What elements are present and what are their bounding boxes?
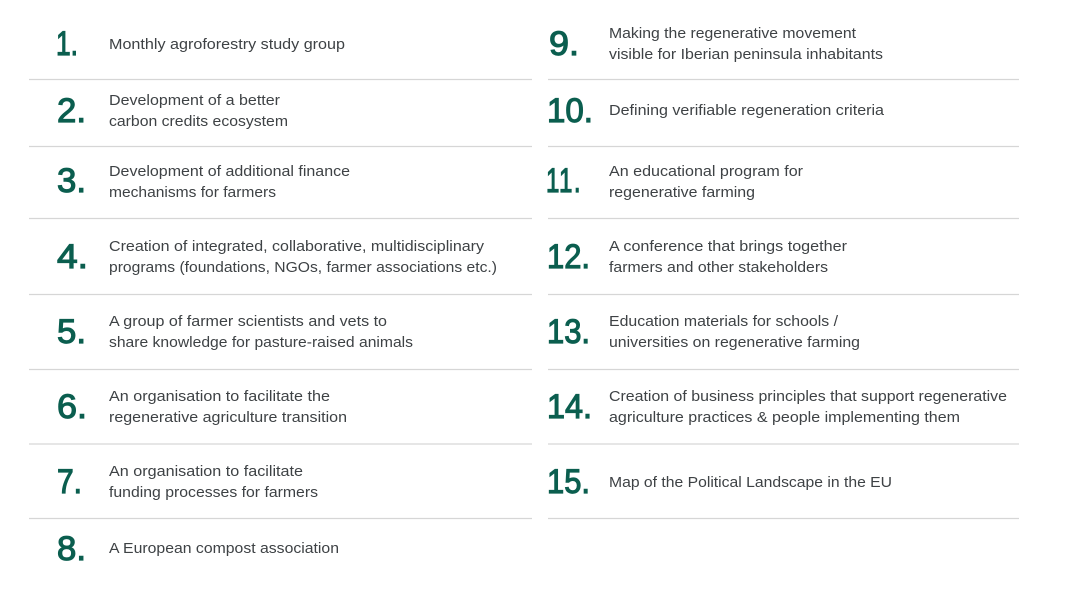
item 7: funding organisation <box>57 463 318 501</box>
item 4: multidisciplinary programs <box>57 238 497 276</box>
item 6: transition organisation: An organisation to facilitate the <box>109 389 330 405</box>
item 6: transition organisation <box>57 388 347 426</box>
item 11: educational program: An educational program for <box>609 164 803 180</box>
item 8: compost association: 8. <box>57 530 86 568</box>
item 9: visible movement: visible for Iberian peninsula inhabitants <box>609 47 883 63</box>
item 12: conference: A conference that brings together <box>609 239 847 255</box>
item 9: visible movement: Making the regenerative movement <box>609 26 856 42</box>
item 3: additional finance mechanisms: 3. <box>57 162 86 200</box>
item 1: agroforestry study group <box>56 25 345 63</box>
item 5: farmer scientists and vets: 5. <box>57 313 86 351</box>
item 10: regeneration criteria: 10. <box>547 92 593 130</box>
item 12: conference <box>547 238 847 276</box>
item 13: education materials: Education materials for schools / <box>609 314 839 330</box>
item 15: political landscape map: Map of the Political Landscape in the EU <box>609 475 892 491</box>
item 1: agroforestry study group: 1. <box>56 25 78 63</box>
item 5: farmer scientists and vets: A group of farmer scientists and vets to <box>109 314 387 330</box>
item 8: compost association <box>57 530 339 568</box>
item 2: carbon credits ecosystem: Development of a better <box>109 93 280 109</box>
item 2: carbon credits ecosystem <box>57 92 288 130</box>
item 9: visible movement <box>549 25 883 63</box>
item 6: transition organisation: 6. <box>57 388 87 426</box>
item 10: regeneration criteria <box>547 92 885 130</box>
item 12: conference: farmers and other stakeholders <box>609 260 828 276</box>
item 14: business principles <box>547 388 1007 426</box>
item 4: multidisciplinary programs: 4. <box>57 238 88 276</box>
item 13: education materials: universities on regenerative farming <box>609 335 860 351</box>
item 15: political landscape map <box>547 463 892 501</box>
item 2: carbon credits ecosystem: carbon credits ecosystem <box>109 114 288 130</box>
item 1: agroforestry study group: Monthly agroforestry study group <box>109 37 345 53</box>
item 5: farmer scientists and vets: share knowledge for pasture-raised animals <box>109 335 413 351</box>
item 13: education materials: 13. <box>547 313 590 351</box>
item 7: funding organisation: An organisation to facilitate <box>109 464 303 480</box>
item 10: regeneration criteria: Defining verifiable regeneration criteria <box>609 103 885 119</box>
item 3: additional finance mechanisms: Development of additional finance <box>109 164 350 180</box>
item 14: business principles: agriculture practices & people implementing them <box>609 410 960 426</box>
item 3: additional finance mechanisms <box>57 162 350 201</box>
item 4: multidisciplinary programs: programs (foundations, NGOs, farmer associations etc.) <box>109 260 497 276</box>
item 14: business principles: 14. <box>547 388 592 426</box>
item 7: funding organisation: funding processes for farmers <box>109 485 318 501</box>
item 7: funding organisation: 7. <box>57 463 82 501</box>
item 14: business principles: Creation of business principles that support regenerative <box>609 389 1007 405</box>
item 12: conference: 12. <box>547 238 590 276</box>
item 2: carbon credits ecosystem: 2. <box>57 92 86 130</box>
item 4: multidisciplinary programs: Creation of integrated, collaborative, multidisciplinary <box>109 239 485 255</box>
item 8: compost association: A European compost association <box>109 541 339 557</box>
item 11: educational program <box>546 162 803 201</box>
item 11: educational program: regenerative farming <box>609 185 755 201</box>
item 9: visible movement: 9. <box>549 25 579 63</box>
item 3: additional finance mechanisms: mechanisms for farmers <box>109 185 276 201</box>
item 13: education materials <box>547 313 860 351</box>
item 5: farmer scientists and vets <box>57 313 413 351</box>
item 15: political landscape map: 15. <box>547 463 590 501</box>
item 6: transition organisation: regenerative agriculture transition <box>109 410 347 426</box>
item 11: educational program: 11. <box>546 162 582 200</box>
